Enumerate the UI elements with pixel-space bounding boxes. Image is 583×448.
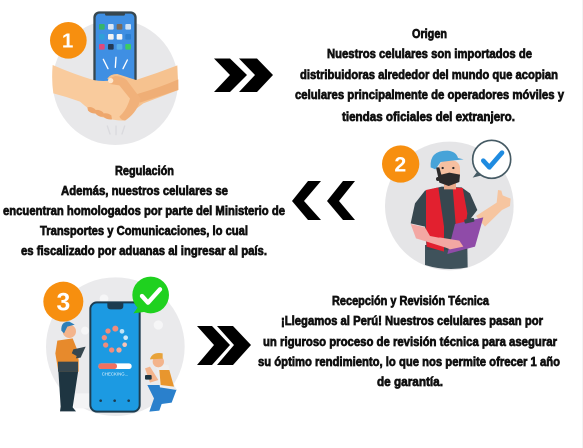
text block: Regulación: es fiscalizado por aduanas al ingresar al país. xyxy=(21,244,267,258)
text block: Origen: Origen xyxy=(412,27,447,41)
text block: Origen: tiendas oficiales del extranjero. xyxy=(342,110,515,124)
arrow: left chevrons xyxy=(292,181,355,220)
badge: number 3 xyxy=(43,282,83,322)
text block: Regulación: Transportes y Comunicaciones, lo cual xyxy=(40,224,248,238)
arrow: first right chevrons xyxy=(214,58,273,92)
text block: Origen: distribuidoras alrededor del mundo que acopian xyxy=(300,68,558,82)
icon: speech bubble with check xyxy=(473,140,511,178)
badge: number 1: 1 xyxy=(62,30,73,53)
illustration 2: worker with clipboard xyxy=(382,140,514,270)
text block: Regulación: Además, nuestros celulares se xyxy=(61,184,228,198)
icon: handshake xyxy=(52,65,178,135)
illustration 1: phone and handshake xyxy=(50,11,178,145)
phone: checking screen: CHECKING... xyxy=(102,372,128,377)
icon: green check bubble xyxy=(132,277,169,313)
illustration 3: phone check with technicians xyxy=(43,277,185,416)
phone: checking screen xyxy=(90,302,140,412)
icon: smartphone xyxy=(93,11,137,86)
text block: Recepción y Revisión Técnica: de garantía. xyxy=(377,375,443,389)
text block: Recepción y Revisión Técnica xyxy=(258,294,560,389)
text block: Regulación: Regulación xyxy=(115,164,174,178)
text block: Regulación: encuentran homologados por parte del Ministerio de xyxy=(3,204,285,218)
text block: Origen xyxy=(295,27,564,124)
technician: left with tablet xyxy=(55,322,86,411)
text block: Regulación xyxy=(3,164,285,258)
text block: Recepción y Revisión Técnica: Recepción y Revisión Técnica xyxy=(332,294,490,308)
badge: number 2: 2 xyxy=(394,153,406,177)
text block: Origen: celulares principalmente de operadores móviles y xyxy=(295,88,564,102)
worker figure xyxy=(411,151,511,269)
arrow: second right chevrons xyxy=(197,326,251,365)
text block: Recepción y Revisión Técnica: ¡Llegamos al Perú! Nuestros celulares pasan por xyxy=(281,314,543,328)
text block: Recepción y Revisión Técnica: su óptimo rendimiento, lo que nos permite ofrecer 1 año xyxy=(258,355,560,369)
technician: right crouching xyxy=(145,353,177,412)
text block: Recepción y Revisión Técnica: un riguroso proceso de revisión técnica para asegurar xyxy=(263,335,557,349)
text block: Origen: Nuestros celulares son importados de xyxy=(327,47,532,61)
badge: number 3: 3 xyxy=(56,290,70,317)
